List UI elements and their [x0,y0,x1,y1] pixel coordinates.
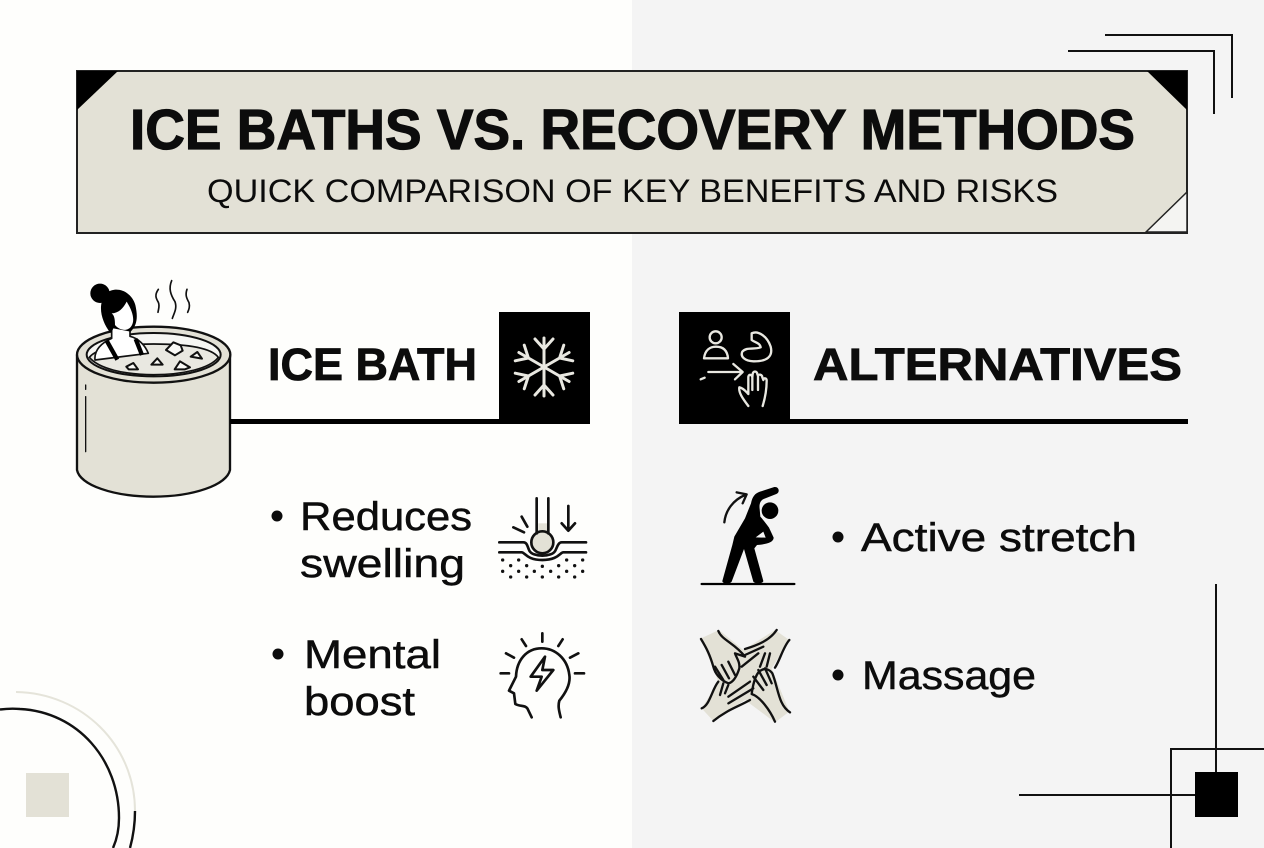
icon: thermometer on skin [499,498,586,579]
item: reduces swelling [272,495,586,586]
face [112,302,133,330]
ice bath heading [230,312,590,424]
hair bun [90,284,110,303]
banner corner top left [77,71,118,110]
curved arrow [724,492,747,522]
water [89,344,218,375]
icon: woman in ice bath tub [77,281,230,497]
alternatives heading [679,312,1188,424]
heading rule [230,419,500,424]
bullet [832,670,844,680]
item: massage [701,630,1036,722]
woman [90,284,148,360]
hand lower left [702,682,753,721]
item text: Active stretch [861,516,1137,560]
hair [101,290,137,333]
icon: head with lightning bolt [501,633,584,717]
hand upper left [701,631,745,683]
heading text: ICE BATH [268,339,477,390]
hand lower right [752,668,790,722]
item: mental boost [272,633,584,724]
tub inner [87,333,221,376]
icon: stretching figure [702,487,794,584]
icon: massaging hands [701,630,790,722]
decoration: bottom left arcs and square [0,692,135,848]
icon: recovery methods [701,331,771,406]
head [762,502,778,519]
item text: Massage [862,654,1036,698]
banner panel [77,71,1187,233]
arm gap [756,532,766,538]
hand upper right [742,630,789,668]
item text: Reduces [300,495,472,539]
steam [156,281,189,318]
ground [702,580,794,587]
heading text: ALTERNATIVES [813,339,1182,390]
icon: snowflake [514,338,574,396]
heading icon box [499,312,590,424]
bullet [272,510,282,522]
title banner [77,71,1187,233]
shoulders and neck [95,322,148,360]
bullet [272,648,284,660]
tub body [77,355,230,497]
banner corner bottom right [1146,192,1187,232]
tub highlights [84,385,88,452]
item text: swelling [300,542,465,586]
hands fill [701,630,789,722]
heading rule [790,419,1188,424]
item text: boost [304,680,415,724]
heading icon box [679,312,790,424]
item text: Mental [304,633,441,677]
title: ICE BATHS VS. RECOVERY METHODS [130,98,1135,162]
banner corner top right [1147,71,1187,110]
decoration: bottom right geometry [1019,584,1264,848]
subtitle: QUICK COMPARISON OF KEY BENEFITS AND RISKS [207,173,1058,209]
swimsuit straps [107,339,142,360]
tub rim [77,327,230,383]
item: active stretch [702,487,1137,584]
ice cubes [126,342,202,369]
body [722,487,779,583]
bullet [832,532,844,542]
decoration: top right corner lines [1068,35,1232,114]
